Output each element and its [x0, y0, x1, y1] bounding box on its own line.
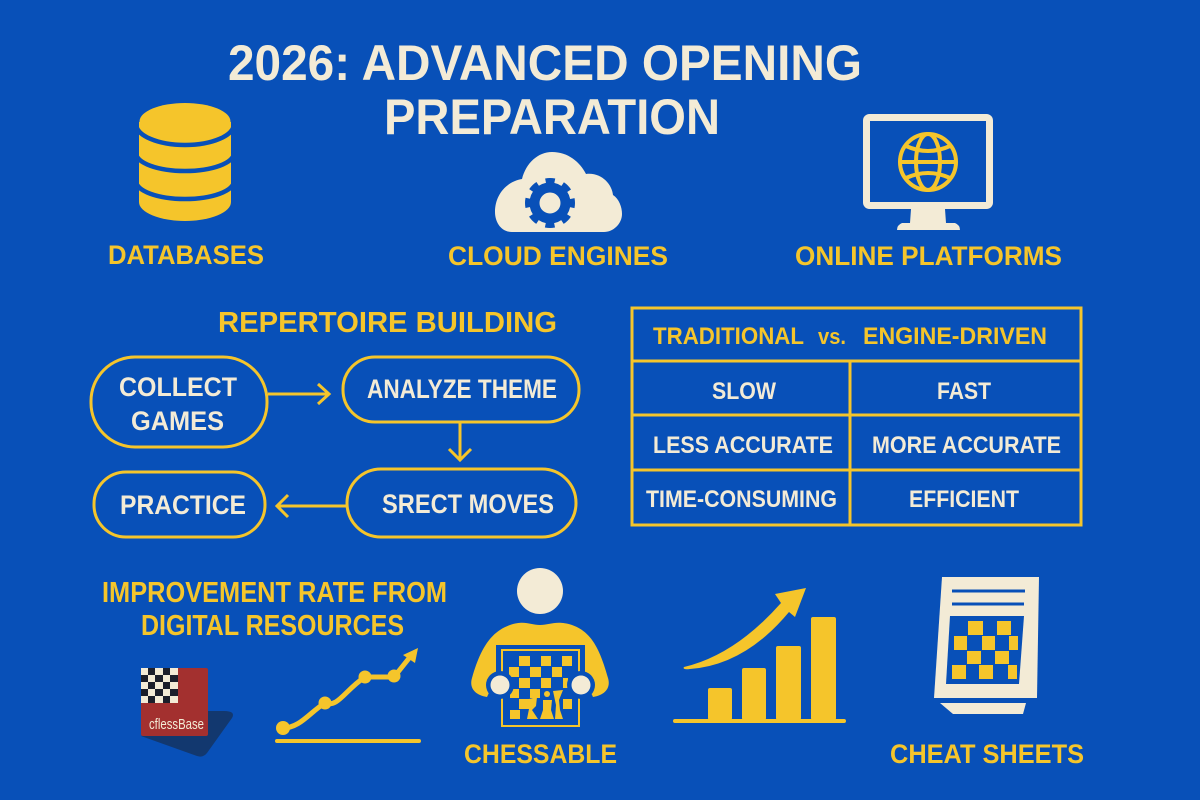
icon: database	[136, 103, 234, 221]
title: 2026: ADVANCED OPENING	[228, 35, 862, 91]
step: select moves: SRECT MOVES	[382, 489, 554, 519]
label: cloud engines: CLOUD ENGINES	[448, 241, 668, 271]
icon: cheat sheet	[934, 577, 1039, 714]
table rows: SLOW	[712, 378, 776, 405]
step: collect games: COLLECT	[119, 372, 237, 402]
heading: repertoire building: REPERTOIRE BUILDING	[218, 307, 557, 339]
icon: chessbase box	[141, 668, 233, 757]
step: practice	[94, 472, 265, 537]
icon: chessbase box: cflessBase	[149, 716, 204, 733]
title	[228, 35, 862, 145]
heading: improvement rate: IMPROVEMENT RATE FROM	[102, 577, 447, 609]
arrow: analyze to select	[449, 423, 471, 460]
heading: improvement rate	[102, 577, 447, 642]
arrow: collect to analyze	[268, 384, 329, 404]
label: cheat sheets: CHEAT SHEETS	[890, 739, 1084, 769]
table header: vs.	[818, 324, 846, 349]
heading: improvement rate: DIGITAL RESOURCES	[141, 610, 404, 642]
table rows: EFFICIENT	[909, 486, 1019, 513]
flowchart: repertoire steps	[91, 357, 579, 537]
title: PREPARATION	[384, 89, 720, 145]
step: select moves	[347, 469, 576, 537]
step: collect games	[91, 357, 267, 447]
table rows: FAST	[937, 378, 991, 405]
icon: person holding chessboard	[471, 568, 609, 726]
label: chessable: CHESSABLE	[464, 739, 617, 769]
bar chart with rising arrow	[673, 588, 846, 723]
label: databases: DATABASES	[108, 240, 264, 270]
step: analyze theme: ANALYZE THEME	[367, 374, 557, 404]
label: online platforms: ONLINE PLATFORMS	[795, 241, 1062, 271]
table header	[653, 323, 1047, 350]
chess pieces on board	[525, 690, 563, 719]
comparison table	[632, 308, 1081, 525]
arrow: select to practice	[277, 495, 346, 517]
icon: cloud with gear	[495, 152, 622, 232]
table header: ENGINE-DRIVEN	[863, 323, 1047, 350]
step: collect games: GAMES	[131, 406, 224, 436]
step: practice: PRACTICE	[120, 490, 246, 520]
table rows: MORE ACCURATE	[872, 432, 1061, 459]
step: analyze theme	[343, 357, 579, 422]
table rows: LESS ACCURATE	[653, 432, 833, 459]
table header: TRADITIONAL	[653, 323, 804, 350]
line chart: improvement	[275, 648, 421, 743]
table rows: TIME-CONSUMING	[646, 486, 837, 513]
icon: monitor with globe	[866, 118, 990, 230]
table rows	[646, 378, 1061, 513]
